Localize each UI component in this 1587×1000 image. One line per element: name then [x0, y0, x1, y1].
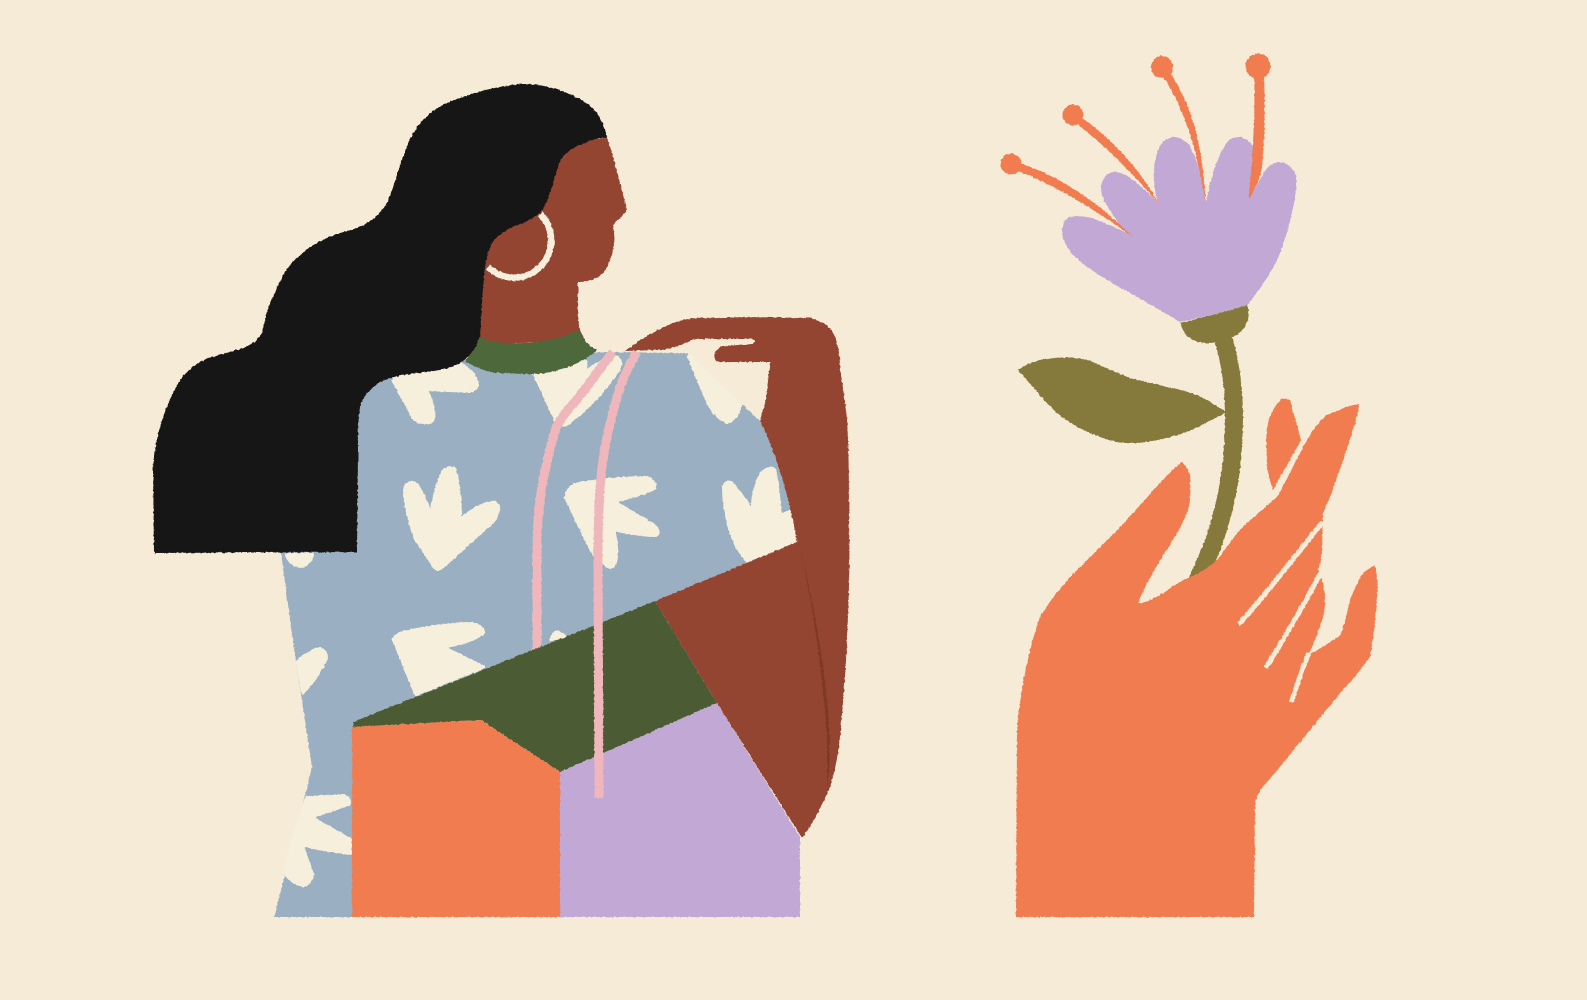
arm and hand [625, 317, 849, 838]
collar [465, 330, 597, 374]
left bag strap [537, 352, 613, 650]
bag purple panel [560, 703, 800, 917]
head and neck [480, 138, 627, 345]
figure: woman with bag [153, 84, 849, 917]
flower stem [1197, 335, 1234, 582]
stamen 2 [1062, 104, 1159, 204]
back finger [1266, 398, 1301, 490]
stamen 4 [1246, 54, 1270, 199]
shirt leaf pattern [285, 356, 795, 885]
flower calyx [1180, 305, 1249, 343]
palm and fingers [1016, 404, 1377, 917]
leaf [1018, 358, 1227, 443]
finger lines [1240, 524, 1321, 700]
bag orange panel [352, 720, 560, 917]
figure: hand holding flower [1000, 54, 1377, 917]
hand [1016, 398, 1377, 917]
shirt [274, 352, 797, 917]
stamen 1 [1000, 154, 1133, 237]
flower stamens [1000, 54, 1270, 237]
stamen 3 [1151, 56, 1206, 204]
flower petals [1062, 137, 1296, 322]
earring [488, 214, 551, 278]
right bag strap [598, 352, 637, 798]
hair [153, 84, 607, 553]
arm shadow [800, 547, 830, 790]
bag flap [353, 601, 717, 772]
